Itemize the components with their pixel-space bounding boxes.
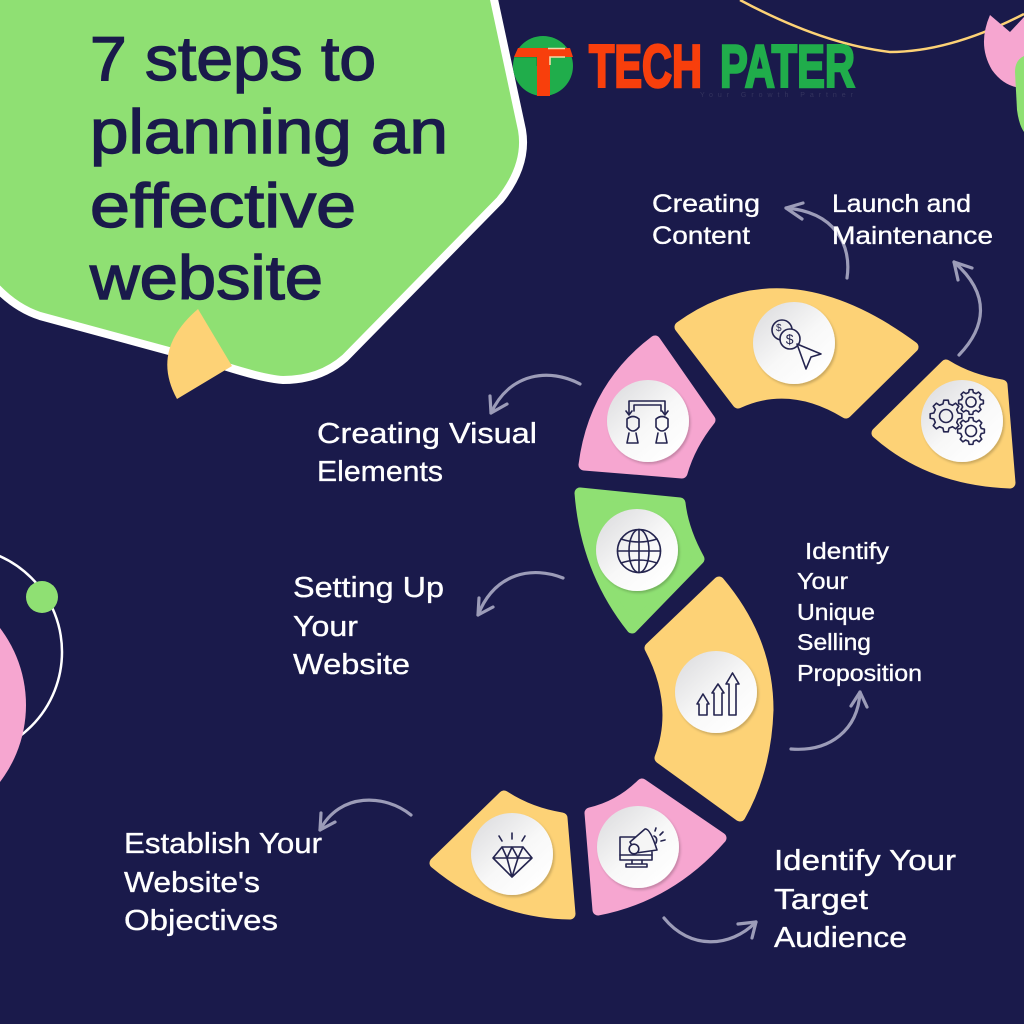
left green dot <box>26 581 58 613</box>
label: launch and maintenance: Launch and <box>832 190 971 218</box>
logo wordmark: TECH <box>589 33 702 100</box>
logo <box>513 33 855 100</box>
step: setting up your website segment <box>580 493 699 628</box>
left pink circle <box>0 578 26 832</box>
label: creating content: Content <box>652 222 750 250</box>
label: identify your unique selling proposition <box>797 538 922 686</box>
step: identify your target audience segment <box>590 784 721 910</box>
label: creating content <box>652 190 760 250</box>
label: setting up your website: Website <box>293 649 410 681</box>
label: creating visual elements <box>317 418 537 488</box>
title: website <box>89 244 323 313</box>
label: establish your website's objectives <box>124 828 322 937</box>
top right petals <box>984 15 1024 132</box>
label: launch and maintenance <box>832 190 993 250</box>
arrow: to launch and maintenance <box>954 262 981 355</box>
arrow: to setting up your website <box>478 573 563 615</box>
icon: people exchange <box>607 380 689 462</box>
icon: globe <box>596 509 678 591</box>
step: creating content segment <box>680 294 913 413</box>
arrow: to establish objectives <box>320 800 411 830</box>
label: setting up your website: Setting Up <box>293 572 444 604</box>
step: creating visual elements segment <box>584 341 710 473</box>
step: unique selling proposition segment <box>650 582 768 816</box>
label: identify your unique selling proposition: Identify <box>805 538 890 564</box>
label: identify your unique selling proposition: Proposition <box>797 660 922 686</box>
label: creating content: Creating <box>652 190 760 218</box>
icon: coins and cursor <box>753 302 835 384</box>
title: planning an <box>90 98 448 167</box>
label: launch and maintenance: Maintenance <box>832 222 993 250</box>
logo tagline: Your Growth Partner <box>700 92 854 99</box>
title: effective <box>90 172 356 241</box>
title <box>89 25 448 313</box>
label: identify your target audience: Audience <box>774 922 907 954</box>
arrow: to target audience <box>664 918 756 942</box>
icon: megaphone on monitor <box>597 806 679 888</box>
arrow: to creating content <box>786 203 848 278</box>
title: 7 steps to <box>90 25 376 94</box>
logo mark <box>513 36 573 96</box>
left orbit ring <box>0 547 62 757</box>
label: identify your target audience: Identify Your <box>774 845 956 877</box>
step: launch and maintenance segment <box>877 365 1010 483</box>
arrow: to unique selling proposition <box>791 692 867 749</box>
label: creating visual elements: Elements <box>317 456 443 488</box>
label: setting up your website: Your <box>293 611 358 643</box>
yellow leaf accent <box>167 309 232 399</box>
label: identify your unique selling proposition: Selling <box>797 629 871 655</box>
label: setting up your website <box>293 572 444 681</box>
icon: diamond <box>471 813 553 895</box>
label: identify your unique selling proposition: Unique <box>797 599 875 625</box>
header blob <box>0 0 523 380</box>
arrow: to creating visual elements <box>490 375 580 413</box>
label: identify your target audience: Target <box>774 884 868 916</box>
logo: PATER <box>720 33 855 100</box>
top decorative curve <box>740 0 1024 52</box>
icon: gears <box>921 380 1003 462</box>
label: establish your website's objectives: Website's <box>124 867 260 899</box>
icon: coins and cursor: $ <box>776 323 782 334</box>
label: establish your website's objectives: Objectives <box>124 905 278 937</box>
label: identify your unique selling proposition: Your <box>797 568 848 594</box>
label: creating visual elements: Creating Visual <box>317 418 537 450</box>
label: establish your website's objectives: Establish Your <box>124 828 322 860</box>
step: establish objectives segment <box>435 796 570 914</box>
icon: rising arrows <box>675 651 757 733</box>
icon: coins and cursor: $ <box>786 331 794 347</box>
label: identify your target audience <box>774 845 956 954</box>
